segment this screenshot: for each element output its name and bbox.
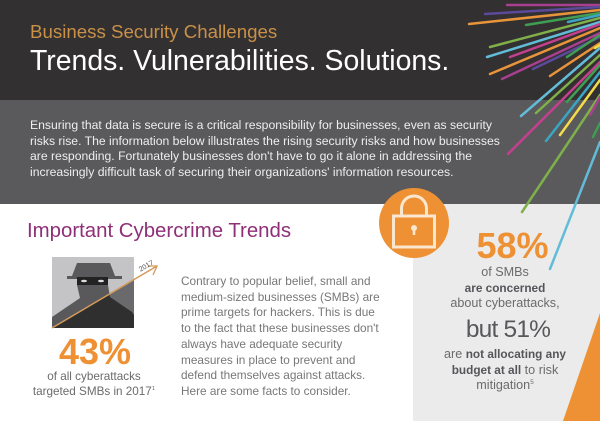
- stat: 43%: 43%: [59, 331, 131, 372]
- body paragraph: measures in place to prevent and: [181, 353, 355, 367]
- budget text: budget at all to risk: [452, 362, 558, 376]
- subtitle: Business Security Challenges: [30, 21, 277, 42]
- stat caption: of all cyberattacks: [47, 370, 141, 383]
- section heading: Important Cybercrime Trends: [27, 220, 291, 242]
- title: Trends. Vulnerabilities. Solutions.: [30, 45, 449, 77]
- concern text: of SMBs: [481, 265, 529, 279]
- budget text: are not allocating any: [444, 347, 566, 361]
- body paragraph: prime targets for hackers. This is due: [181, 305, 375, 319]
- intro paragraph: increasingly difficult task of securing their organizations' information resources.: [30, 165, 453, 179]
- budget text: mitigation5: [476, 378, 534, 392]
- body paragraph: medium-sized businesses (SMBs) are: [181, 290, 380, 304]
- stat caption: targeted SMBs in 20171: [33, 385, 155, 398]
- body paragraph: Contrary to popular belief, small and: [181, 274, 371, 288]
- icon: hacker illustration: [52, 257, 158, 329]
- intro paragraph: are responding. Fortunately businesses don't have to go it alone in addressing the: [30, 149, 472, 163]
- stat caption: [33, 370, 155, 398]
- body paragraph: Here are some facts to consider.: [181, 384, 351, 398]
- orange corner shape: [563, 313, 600, 421]
- concern text: are concerned: [465, 280, 545, 294]
- body paragraph: always have adequate security: [181, 337, 342, 351]
- body paragraph: to the fact that these businesses don't: [181, 321, 379, 335]
- intro band: [0, 100, 600, 204]
- body paragraph: [181, 274, 380, 398]
- stat: but 51%: but 51%: [466, 316, 550, 343]
- stat: 58%: 58%: [476, 225, 549, 266]
- concern text: [450, 265, 560, 310]
- icon: padlock: [379, 188, 449, 258]
- intro paragraph: Ensuring that data is secure is a critical responsibility for businesses, even as security: [30, 118, 492, 132]
- concern text: about cyberattacks,: [450, 296, 560, 310]
- arrow year label: 2017: [138, 260, 155, 273]
- header band: [0, 0, 600, 100]
- body paragraph: defend themselves against attacks.: [181, 368, 365, 382]
- intro paragraph: [30, 118, 500, 179]
- right stat panel background: [413, 204, 600, 421]
- intro paragraph: risks rise. The information below illustrates the rising security risks and how businesses: [30, 134, 500, 148]
- budget text: [444, 347, 566, 392]
